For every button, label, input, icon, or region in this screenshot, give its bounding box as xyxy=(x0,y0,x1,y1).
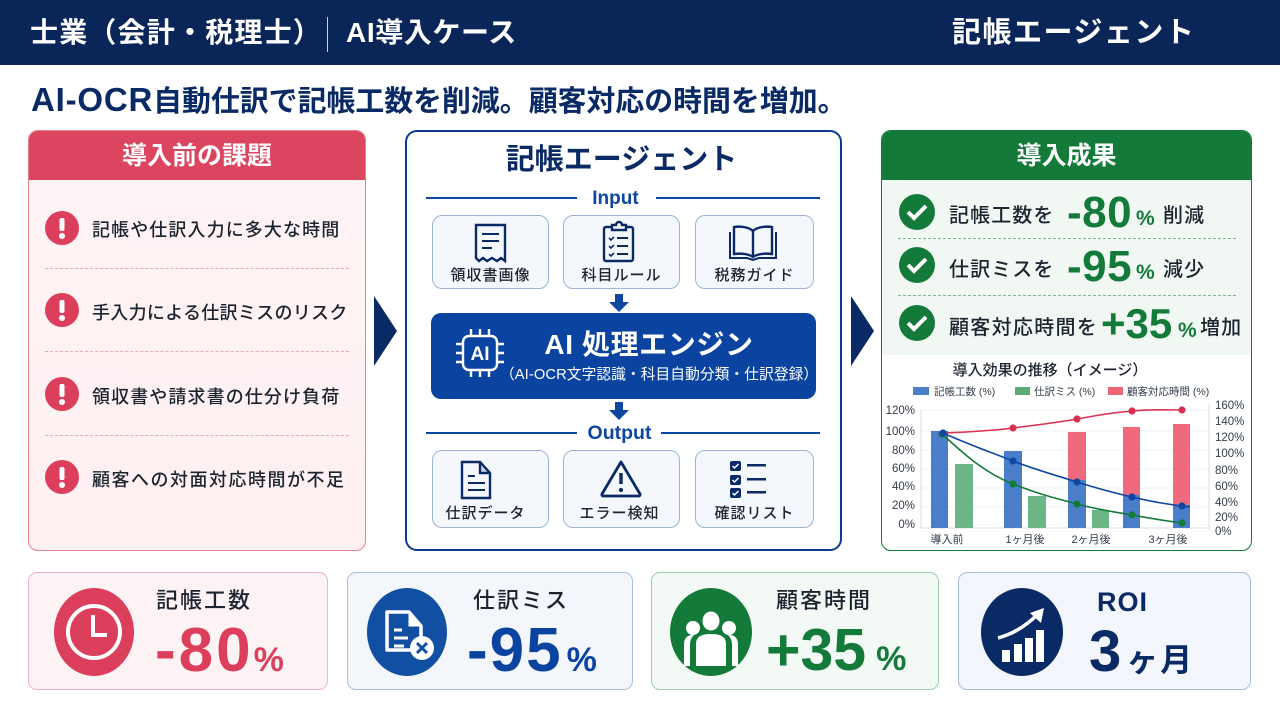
input card: account rules: 科目ルール xyxy=(581,267,662,284)
input section label: Input xyxy=(592,188,639,209)
KPI label: 顧客時間 xyxy=(776,588,872,613)
panel: results xyxy=(881,130,1252,551)
arrow: agent to results xyxy=(851,296,874,366)
icon: AI chip: AI xyxy=(470,344,490,365)
KPI card: ROI xyxy=(958,572,1251,690)
header agent name: 記帳エージェント xyxy=(952,17,1195,49)
input card: account rules xyxy=(563,215,680,289)
chart line: bookkeeping hours xyxy=(939,429,1190,510)
right axis labels: 120% xyxy=(1215,432,1244,444)
left axis labels: 40% xyxy=(892,481,915,493)
result 2: 仕訳ミスを xyxy=(949,259,1054,281)
arrow: engine to output xyxy=(609,402,629,420)
input card: tax guide: 税務ガイド xyxy=(714,267,794,284)
output card: journal data xyxy=(432,450,549,528)
challenge 2 xyxy=(45,293,348,327)
challenge 4 xyxy=(45,460,346,494)
x axis labels xyxy=(930,532,1188,546)
result 2 xyxy=(899,242,1205,291)
engine title: AI 処理エンジン xyxy=(544,329,754,360)
KPI label: 仕訳ミス xyxy=(473,588,569,613)
chart line: customer time xyxy=(943,406,1186,433)
right axis labels: 60% xyxy=(1215,481,1238,493)
KPI value: 3ヶ月 xyxy=(1089,619,1194,684)
main headline: AI-OCR自動仕訳で記帳工数を削減。顧客対応の時間を増加。 xyxy=(31,81,846,118)
challenge 1: 記帳や仕訳入力に多大な時間 xyxy=(92,220,340,240)
result 2: -95 xyxy=(1067,242,1132,291)
left axis labels xyxy=(886,405,915,531)
challenge 2: 手入力による仕訳ミスのリスク xyxy=(92,303,348,323)
results list background xyxy=(882,180,1251,355)
x axis labels: 導入前 xyxy=(930,532,964,546)
results heading xyxy=(880,129,1253,180)
input card: receipt image: 領収書画像 xyxy=(450,267,530,284)
KPI label: 記帳工数 xyxy=(156,588,252,613)
x axis labels: 3ヶ月後 xyxy=(1148,532,1188,546)
right axis labels: 80% xyxy=(1215,465,1238,477)
result 1 xyxy=(899,188,1205,237)
left axis labels: 20% xyxy=(892,500,915,512)
panel: before challenges xyxy=(28,130,366,551)
icon: growth chart xyxy=(981,588,1063,676)
left axis labels: 120% xyxy=(886,405,915,417)
KPI card: bookkeeping hours xyxy=(28,572,328,690)
input card: tax guide xyxy=(695,215,814,289)
icon: clock xyxy=(54,588,134,676)
result 1: 削減 xyxy=(1163,205,1205,227)
KPI card: journal errors xyxy=(347,572,633,690)
result 1: 記帳工数を xyxy=(949,205,1054,227)
x axis labels: 1ヶ月後 xyxy=(1005,532,1045,546)
chart line: journal errors xyxy=(938,430,1186,527)
chart legend: 仕訳ミス (%) xyxy=(1034,385,1095,398)
agent title: 記帳エージェント xyxy=(506,144,737,176)
left axis labels: 60% xyxy=(892,463,915,475)
KPI value: -95% xyxy=(467,616,597,685)
right axis labels: 160% xyxy=(1215,400,1244,412)
panel heading xyxy=(27,129,367,180)
result 3: +35 xyxy=(1101,300,1172,347)
right axis labels xyxy=(1215,400,1244,538)
arrow: input to engine xyxy=(609,294,629,312)
header divider xyxy=(327,17,328,52)
challenge 4: 顧客への対面対応時間が不足 xyxy=(92,470,346,490)
icon: document error xyxy=(367,588,447,676)
result 1: -80 xyxy=(1067,188,1132,237)
result 2: 減少 xyxy=(1163,259,1205,281)
panel: agent xyxy=(405,130,842,551)
right axis labels: 40% xyxy=(1215,497,1238,509)
right axis labels: 100% xyxy=(1215,448,1244,460)
chart title: 導入効果の推移（イメージ） xyxy=(953,361,1147,379)
right axis labels: 0% xyxy=(1215,526,1232,538)
icon: AI chip xyxy=(456,329,504,377)
KPI value: -80% xyxy=(155,616,284,685)
result 3: 増加 xyxy=(1200,317,1242,339)
challenge 3: 領収書や請求書の仕分け負荷 xyxy=(92,387,340,407)
results heading: 導入成果 xyxy=(1016,142,1116,170)
KPI card: customer time xyxy=(651,572,939,690)
challenge 1 xyxy=(45,211,340,245)
header case label: AI導入ケース xyxy=(346,17,517,48)
chart legend xyxy=(913,385,1209,398)
chart gridlines xyxy=(921,410,1208,507)
KPI label: ROI xyxy=(1097,587,1148,617)
left axis labels: 0% xyxy=(898,519,915,531)
right axis labels: 20% xyxy=(1215,512,1238,524)
AI engine block xyxy=(431,313,816,399)
chart legend: 顧客対応時間 (%) xyxy=(1127,385,1209,398)
result 3: 顧客対応時間を xyxy=(949,317,1098,339)
chart legend: 記帳工数 (%) xyxy=(934,385,995,398)
challenge 3 xyxy=(45,377,340,411)
output card: error detection xyxy=(563,450,680,528)
left axis labels: 100% xyxy=(886,426,915,438)
result 1: % xyxy=(1136,207,1155,230)
arrow: challenges to agent xyxy=(374,296,397,366)
output card: check list: 確認リスト xyxy=(714,505,794,522)
result 3 xyxy=(899,300,1242,347)
output section label: Output xyxy=(588,422,651,444)
engine subtitle: （AI-OCR文字認識・科目自動分類・仕訳登録） xyxy=(500,367,818,383)
result 3: % xyxy=(1178,319,1197,342)
header title: 士業（会計・税理士） xyxy=(30,17,322,48)
x axis labels: 2ヶ月後 xyxy=(1071,532,1111,546)
input card: receipt image xyxy=(432,215,549,289)
output card: check list xyxy=(695,450,814,528)
left axis labels: 80% xyxy=(892,445,915,457)
panel heading: 導入前の課題 xyxy=(122,142,272,170)
output card: error detection: エラー検知 xyxy=(579,505,660,522)
right axis labels: 140% xyxy=(1215,416,1244,428)
output card: journal data: 仕訳データ xyxy=(445,505,526,522)
KPI value: +35 % xyxy=(766,617,906,683)
header bar xyxy=(0,0,1280,65)
result 2: % xyxy=(1136,261,1155,284)
icon: people xyxy=(670,588,752,676)
chart bars xyxy=(931,424,1190,528)
